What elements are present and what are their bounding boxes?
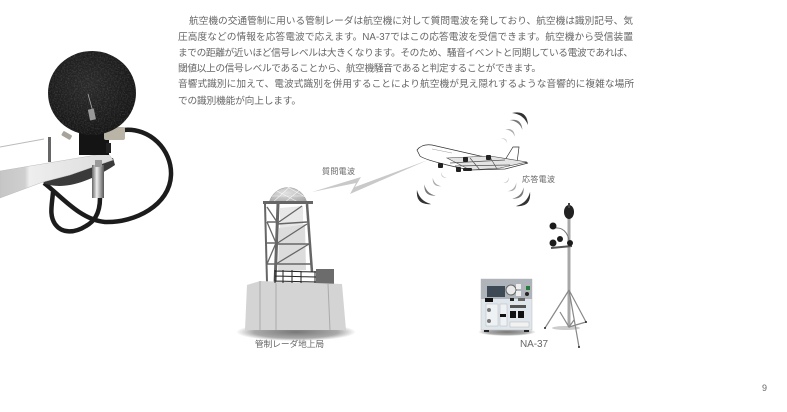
illustration: NA-37 unit	[478, 279, 536, 336]
body text: 音響式識別に加えて、電波式識別を併用することにより航空機が見え隠れするような音響的に複雑な場所	[178, 77, 634, 90]
microphone photo	[0, 51, 171, 231]
page number: 9	[762, 383, 767, 393]
label: interrogation wave: 質問電波	[322, 166, 355, 176]
label: response wave: 応答電波	[522, 174, 555, 184]
illustration: microphone stand	[544, 203, 587, 348]
body text: までの距離が近いほど信号レベルは大きくなります。そのため、騒音イベントと同期している電波であれば、	[178, 46, 633, 59]
body text: 航空機の交通管制に用いる管制レーダは航空機に対して質問電波を発しており、航空機は識別記号、気	[189, 14, 633, 27]
body text: 閾値以上の信号レベルであることから、航空機騒音であると判定することができます。	[178, 62, 541, 74]
body text	[178, 14, 634, 107]
icon: lower left radio waves	[413, 172, 447, 208]
icon: upper right radio waves	[501, 108, 532, 143]
label: NA-37: NA-37	[520, 339, 548, 350]
icon: airplane	[417, 145, 528, 172]
arrow: interrogation wave bolt	[312, 160, 428, 194]
icon: lower right radio waves	[503, 177, 534, 210]
label: radar ground station: 管制レーダ地上局	[255, 338, 324, 349]
body text: での識別機能が向上します。	[178, 94, 301, 107]
illustration: radar ground station	[236, 183, 356, 341]
body text: 圧高度などの情報を応答電波で応えます。NA-37ではこの応答電波を受信できます。航空機から受信装置	[178, 30, 633, 43]
